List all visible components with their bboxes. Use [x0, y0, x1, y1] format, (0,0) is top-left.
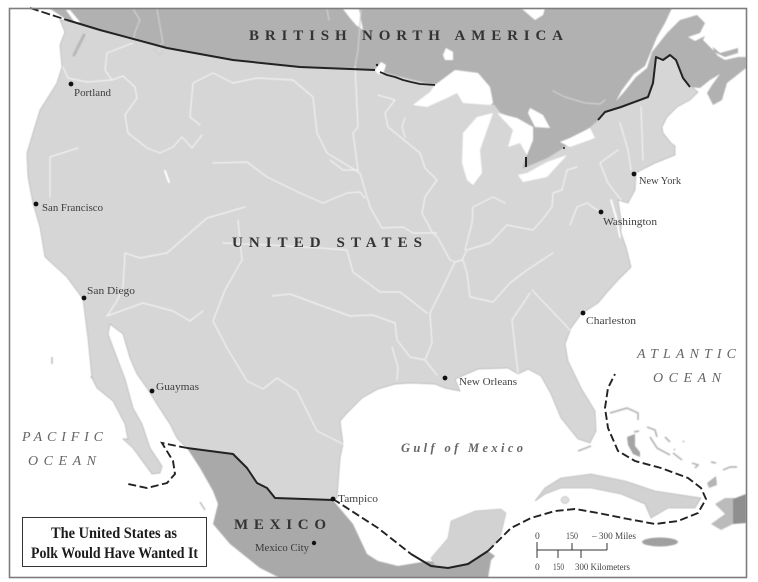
heading: United States: UNITED STATES [232, 235, 422, 251]
Columbia and Snake [63, 43, 202, 153]
city labels: San Francisco [42, 202, 103, 214]
Red River of the North and James [330, 67, 358, 170]
Red River [272, 294, 425, 360]
region: Cuba [535, 474, 701, 518]
dashed maritime claim: Baja California [128, 443, 187, 488]
Missouri [190, 73, 437, 233]
scale bar: – 300 Miles [591, 532, 636, 542]
city labels: Portland [74, 87, 111, 99]
heading: British North America: BRITISH NORTH AMERICA [249, 28, 563, 44]
region: Caribbean islands [561, 408, 746, 546]
city labels [42, 87, 681, 554]
rivers [50, 9, 643, 444]
Florida Keys and Pacific islets [52, 357, 205, 510]
city labels: Washington [603, 216, 658, 228]
region: British North America [49, 8, 746, 168]
region: Mexico [187, 448, 495, 578]
dashed maritime claim: Gulf and Caribbean [333, 374, 706, 554]
scale bar: 0 [535, 532, 540, 542]
Alabama and Savannah [512, 290, 570, 373]
Great Salt Lake [165, 171, 169, 182]
Arkansas and Kansas [223, 243, 427, 313]
city labels: Guaymas [156, 381, 199, 393]
city labels: Charleston [586, 315, 637, 327]
solid claim curve across Yucatan [411, 551, 488, 568]
scale bar: 150 [553, 563, 564, 573]
Wabash [465, 197, 505, 250]
southern boundary line [187, 448, 333, 500]
Yellowstone and Platte [213, 162, 365, 203]
label: Atlantic Ocean: OCEAN [653, 371, 722, 386]
scale bar: 150 [566, 532, 578, 542]
lakes and bays [66, 8, 595, 185]
region: Prince Edward Island [713, 47, 738, 57]
label: Atlantic Ocean [636, 347, 737, 386]
scale bar: 300 Kilometers [575, 563, 630, 573]
heading: Mexico: MEXICO [234, 517, 326, 533]
scale bar: 0 [535, 563, 540, 573]
label: Pacific Ocean [21, 430, 104, 469]
label: Pacific Ocean: OCEAN [28, 454, 97, 469]
northern boundary line [30, 8, 690, 167]
Rio Grande [213, 220, 343, 444]
city markers [34, 82, 636, 545]
Sacramento [50, 148, 78, 197]
city labels: New Orleans [459, 376, 517, 388]
label: Pacific Ocean: PACIFIC [21, 430, 104, 445]
label: Gulf of Mexico: Gulf of Mexico [401, 441, 523, 455]
Ohio [455, 167, 577, 262]
map title box: The United States as [51, 525, 177, 542]
scale bar [535, 532, 636, 573]
Atlantic rivers [570, 107, 643, 225]
Canadian rivers [133, 9, 605, 104]
label: Atlantic Ocean: ATLANTIC [636, 347, 737, 362]
map title box [22, 518, 206, 566]
region: United States claimed territory [27, 20, 698, 500]
city labels: New York [639, 175, 681, 187]
Tennessee [463, 253, 553, 302]
city labels: San Diego [87, 285, 136, 297]
map title box: Polk Would Have Wanted It [31, 545, 199, 562]
Puget Sound [74, 35, 84, 55]
Mississippi [378, 95, 455, 375]
region: Yucatan claimed [431, 509, 506, 568]
city labels: Tampico [338, 493, 379, 505]
city labels: Mexico City [255, 542, 309, 554]
Colorado and Gila [107, 207, 245, 321]
Chesapeake Bay [611, 200, 620, 237]
